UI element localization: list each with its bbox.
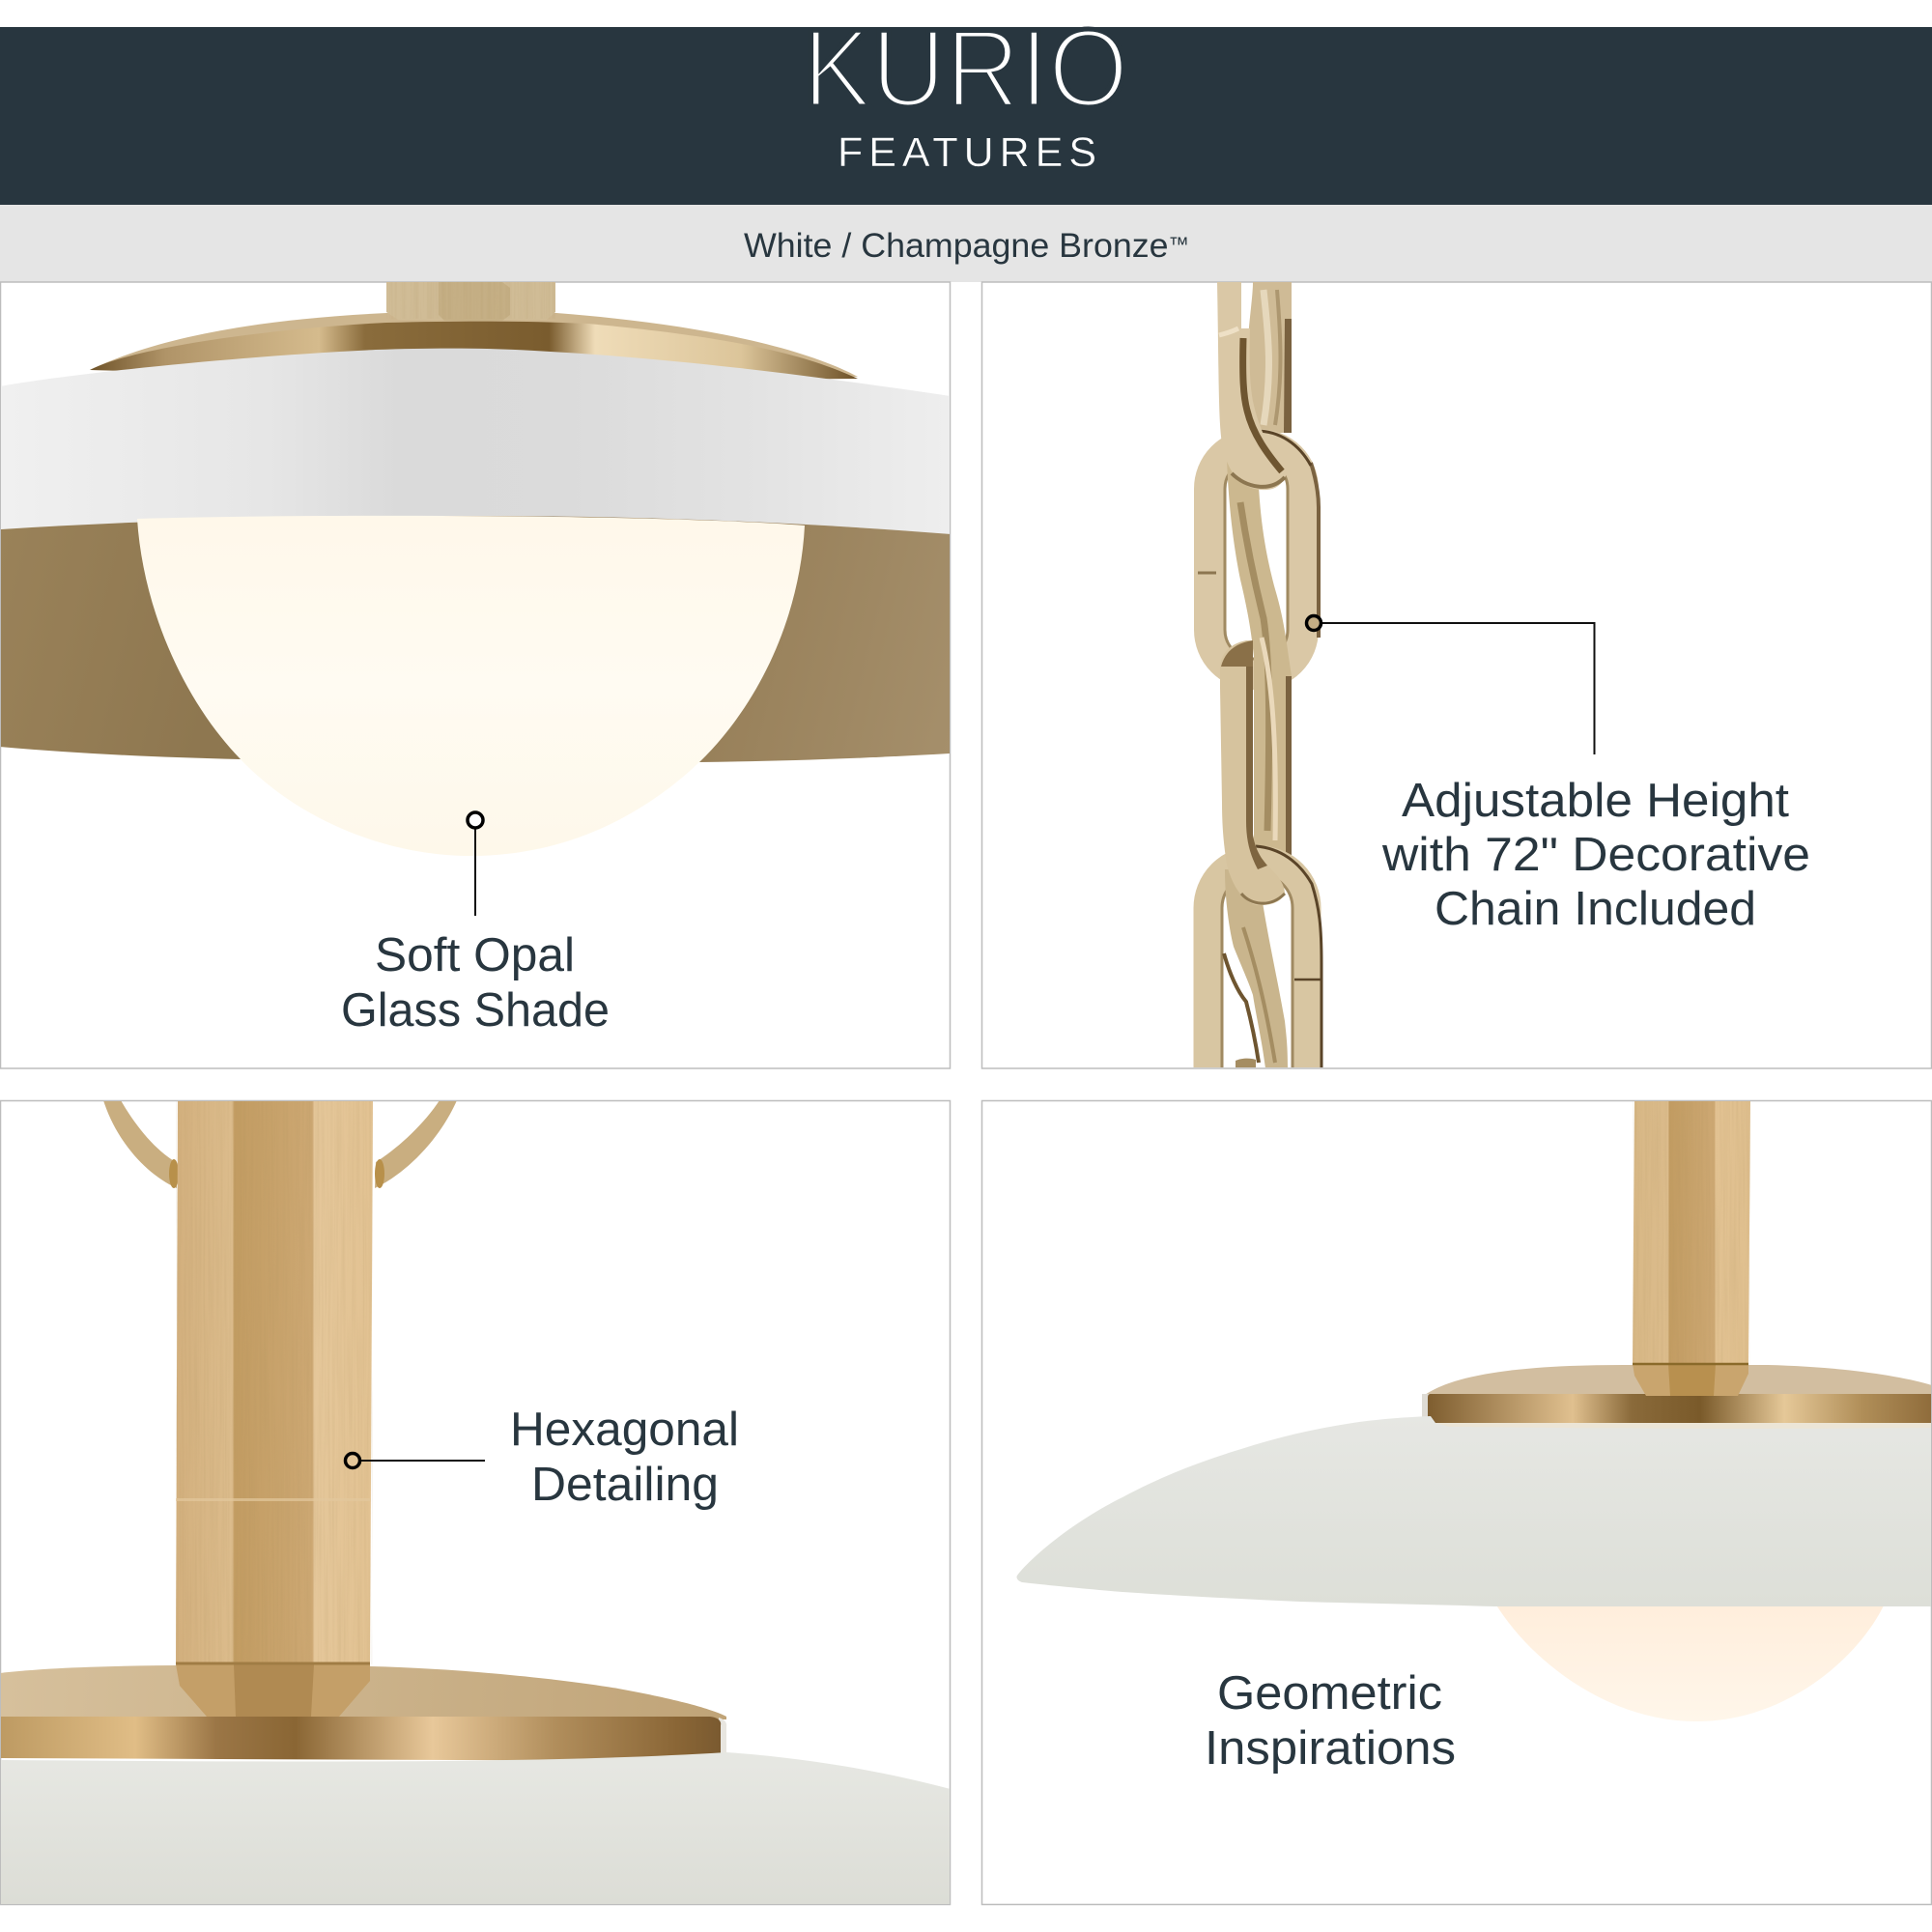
finish label: White / Champagne Bronze [744, 227, 1159, 265]
label: Adjustable Height with 72" Decorative Chain Included: Adjustable Height [1402, 775, 1789, 827]
label: Geometric Inspirations [1205, 1667, 1456, 1775]
marker: glass shade [468, 812, 483, 916]
label: Soft Opal Glass Shade: Glass Shade [341, 984, 610, 1037]
label: Hexagonal Detailing [510, 1404, 739, 1511]
marker and leader: chain [1306, 616, 1594, 754]
panel: hexagonal detailing [0, 1100, 951, 1905]
image: decorative chain [1198, 282, 1321, 1150]
label: Adjustable Height with 72" Decorative Chain Included [1381, 775, 1810, 935]
image: hexagonal stem and canopy [0, 1100, 951, 1904]
image: pendant side view [1017, 1100, 1932, 1721]
image: pendant shade seen from below [0, 282, 951, 856]
panel: soft opal glass shade [0, 282, 951, 1068]
label: Geometric Inspirations: Inspirations [1205, 1722, 1456, 1775]
label: Hexagonal Detailing: Hexagonal [510, 1404, 739, 1456]
finish band [0, 205, 1932, 282]
header band [0, 8, 1932, 205]
label: Soft Opal Glass Shade [341, 929, 610, 1037]
panel: adjustable height chain [981, 282, 1932, 1150]
subtitle: FEATURES: FEATURES [838, 129, 1096, 176]
label: Adjustable Height with 72" Decorative Chain Included: Chain Included [1435, 883, 1756, 935]
label: Hexagonal Detailing: Detailing [531, 1459, 719, 1511]
finish label: ™ [1169, 234, 1189, 256]
label: Adjustable Height with 72" Decorative Chain Included: with 72" Decorative [1381, 829, 1810, 881]
title: KURIO: KURIO [803, 8, 1128, 130]
marker and leader: hexagonal stem [346, 1453, 485, 1468]
label: Geometric Inspirations: Geometric [1217, 1667, 1442, 1719]
panel: geometric inspirations [981, 1100, 1932, 1905]
label: Soft Opal Glass Shade: Soft Opal [375, 929, 575, 981]
